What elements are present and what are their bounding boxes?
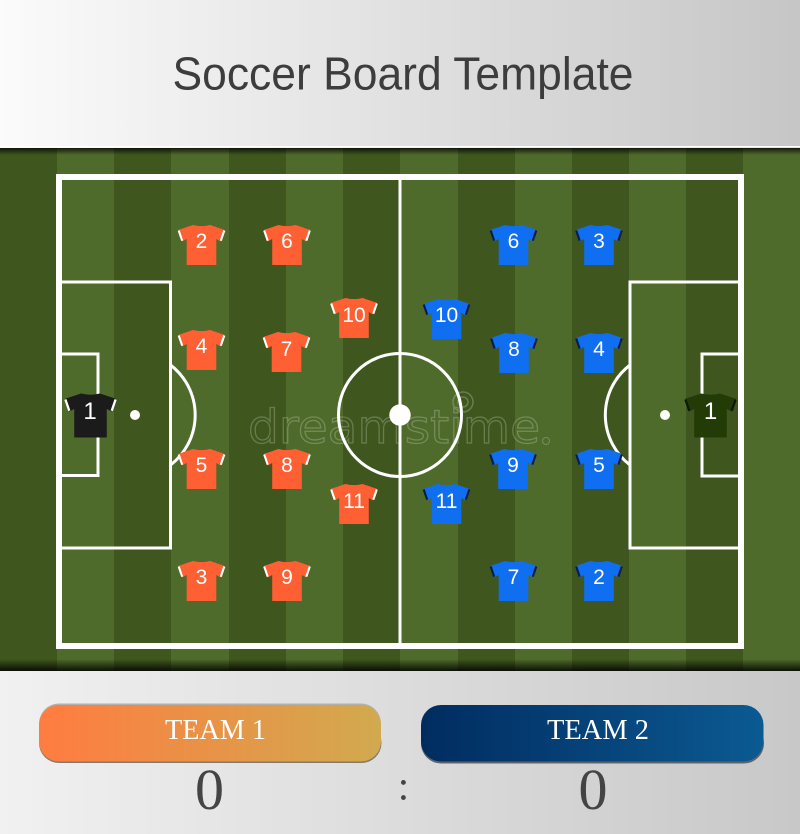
player: blue 9: [490, 449, 536, 489]
player: orange 9: [264, 561, 310, 601]
player: orange 4: [179, 330, 224, 370]
player: blue 9: 9: [507, 454, 519, 477]
player: orange 10: 10: [342, 304, 366, 327]
player: orange 11: 11: [343, 490, 365, 513]
player: orange 6: 6: [281, 230, 293, 253]
player: orange 2: 2: [196, 230, 207, 253]
player: blue 8: [491, 333, 537, 373]
player: orange 8: 8: [281, 454, 293, 477]
player: orange 5: 5: [196, 454, 207, 477]
player: blue 7: 7: [508, 566, 519, 589]
team 2 banner: TEAM 2: [547, 714, 649, 746]
player: blue 4: [576, 333, 622, 373]
player: blue 6: 6: [508, 230, 519, 253]
player: orange 9: 9: [281, 566, 293, 589]
player: blue 10: [424, 299, 469, 339]
player: blue 3: [576, 225, 622, 265]
player: blue 2: 2: [593, 566, 605, 589]
player: orange 4: 4: [196, 335, 208, 358]
player: blue 11: 11: [436, 490, 457, 513]
player: blue 8: 8: [508, 338, 520, 361]
player: blue 7: [491, 561, 536, 601]
watermark: dreamstime: [248, 400, 540, 454]
team 1 banner: TEAM 1: [165, 714, 266, 746]
player: orange 7: 7: [281, 338, 292, 361]
player: orange 7: [264, 332, 309, 372]
team 2 banner: [421, 705, 764, 764]
player: orange 8: [264, 449, 310, 489]
goalkeeper team 2: 1: [704, 398, 717, 425]
player: blue 6: [491, 225, 536, 265]
player: blue 5: [576, 449, 622, 489]
player: blue 3: 3: [593, 230, 605, 253]
goalkeeper team 2: [685, 394, 736, 437]
goalkeeper team 1: 1: [83, 398, 97, 425]
header panel: [0, 0, 800, 148]
goalkeeper team 1: [65, 394, 116, 437]
player: blue 11: [424, 484, 469, 524]
player: orange 6: [264, 225, 310, 265]
player: orange 2: [179, 225, 224, 265]
player: blue 4: 4: [593, 338, 605, 361]
player: orange 11: [331, 484, 377, 524]
score separator: :: [398, 762, 409, 808]
team 1 banner: [39, 704, 382, 763]
player: blue 5: 5: [593, 454, 605, 477]
player: orange 3: [179, 561, 224, 601]
score panel: [0, 671, 800, 834]
team 2 players: [424, 225, 622, 601]
title: Soccer Board Template: [172, 48, 634, 100]
pitch markings: [59, 177, 741, 646]
player: orange 10: [331, 298, 377, 338]
pitch: [0, 148, 800, 671]
score team 2: 0: [578, 757, 608, 822]
player: orange 5: [179, 449, 224, 489]
player: blue 2: [576, 561, 622, 601]
grass stripes: [0, 148, 800, 671]
player: blue 10: 10: [435, 304, 458, 327]
team 1 players: [179, 225, 377, 601]
player: orange 3: 3: [196, 566, 207, 589]
score team 1: 0: [195, 757, 224, 822]
